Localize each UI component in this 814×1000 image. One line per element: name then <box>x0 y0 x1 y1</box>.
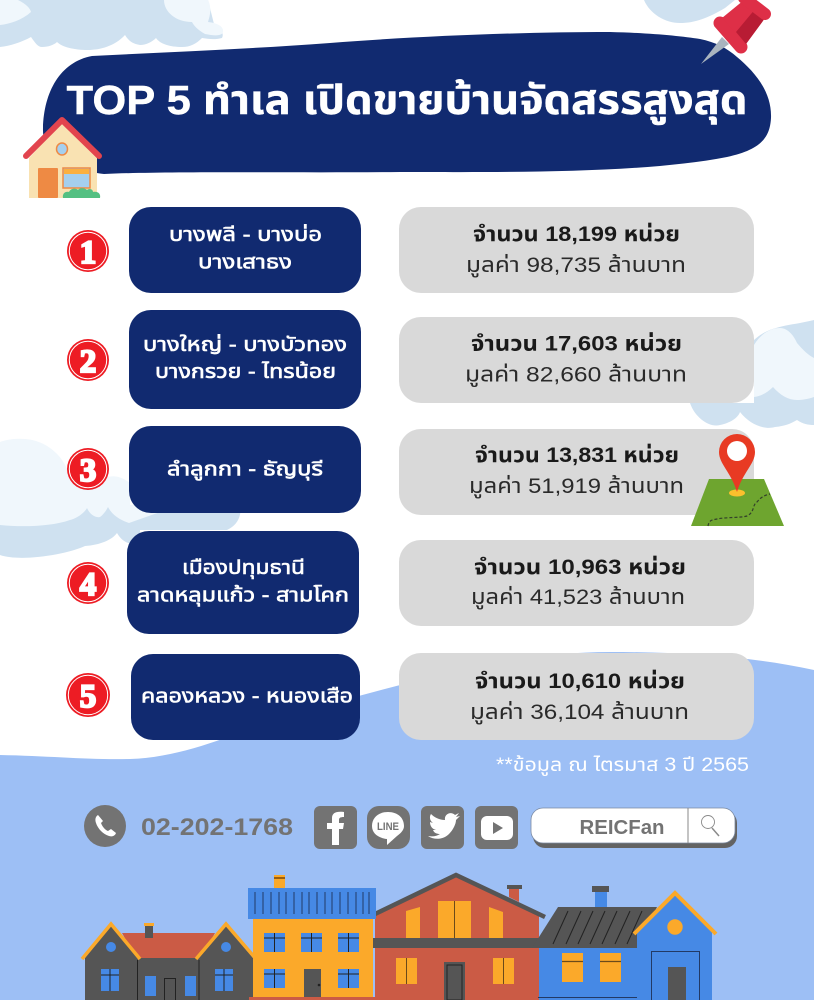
number badge 4 <box>67 562 109 604</box>
stats panel 2: จำนวน 17,603 หน่วย <box>471 332 682 356</box>
area label 3 <box>129 426 361 513</box>
stats panel 2 <box>399 317 754 403</box>
stats panel 5: จำนวน 10,610 หน่วย <box>475 670 685 693</box>
footnote: **ข้อมูล ณ ไตรมาส 3 ปี 2565 <box>496 753 749 777</box>
house: blue <box>532 886 716 1000</box>
phone number: 02-202-1768 <box>141 814 293 841</box>
house: red large <box>373 875 545 1000</box>
number badge 1 <box>67 230 109 272</box>
row 3 <box>67 426 754 515</box>
cloud: top left <box>0 0 223 50</box>
stats panel 1: มูลค่า 98,735 ล้านบาท <box>466 253 686 278</box>
stats panel 5 <box>399 653 754 740</box>
row 1 <box>67 207 754 293</box>
search box: REICFan <box>580 817 664 839</box>
title text: TOP 5 ทำเล เปิดขายบ้านจัดสรรสูงสุด <box>66 77 748 125</box>
illustration: houses <box>82 875 716 1000</box>
icon: line <box>367 806 410 849</box>
icon: facebook <box>314 806 357 849</box>
cloud: top right <box>644 0 735 23</box>
icon: youtube <box>475 806 518 849</box>
area label 2 <box>129 310 361 409</box>
area label 3: ลำลูกกา - ธัญบุรี <box>167 458 323 482</box>
area label 5 <box>131 654 360 740</box>
area label 4: ลาดหลุมแก้ว - สามโคก <box>137 584 349 606</box>
title banner <box>43 32 771 174</box>
area label 4: เมืองปทุมธานี <box>182 557 305 579</box>
search box <box>531 808 737 848</box>
icon: push pin <box>701 0 768 64</box>
stats panel 2: มูลค่า 82,660 ล้านบาท <box>465 362 687 388</box>
stats panel 5: มูลค่า 36,104 ล้านบาท <box>470 700 689 725</box>
cloud: middle right <box>640 320 814 428</box>
area label 5: คลองหลวง - หนองเสือ <box>141 686 353 708</box>
area label 2: บางใหญ่ - บางบัวทอง <box>143 333 347 356</box>
stats panel 3: มูลค่า 51,919 ล้านบาท <box>469 474 684 499</box>
number badge 2: 2 <box>80 344 96 380</box>
area label 1: บางพลี - บางบ่อ <box>169 223 322 246</box>
stats panel 3: จำนวน 13,831 หน่วย <box>475 444 679 467</box>
icon: house <box>26 120 100 198</box>
stats panel 4 <box>399 540 754 626</box>
number badge 3: 3 <box>80 453 96 489</box>
area label 1: บางเสาธง <box>198 252 292 274</box>
contact bar <box>84 805 737 849</box>
stats panel 1 <box>399 207 754 293</box>
number badge 4: 4 <box>80 567 96 603</box>
number badge 3 <box>67 448 109 490</box>
row 5 <box>66 653 754 740</box>
number badge 5: 5 <box>80 679 96 715</box>
stats panel 3 <box>399 429 754 515</box>
stats panel 1: จำนวน 18,199 หน่วย <box>473 223 680 246</box>
icon: phone <box>84 805 126 847</box>
house: grey twin gables <box>82 923 256 1000</box>
row 4 <box>67 531 754 634</box>
stats panel 4: จำนวน 10,963 หน่วย <box>474 556 686 579</box>
background hill <box>0 652 814 1000</box>
icon: twitter <box>421 806 464 849</box>
row 2 <box>67 310 754 409</box>
house: orange <box>248 875 379 1000</box>
area label 2: บางกรวย - ไทรน้อย <box>155 360 336 383</box>
area label 4 <box>127 531 359 634</box>
number badge 2 <box>67 339 109 381</box>
number badge 1: 1 <box>80 235 96 271</box>
stats panel 4: มูลค่า 41,523 ล้านบาท <box>471 585 685 610</box>
area label 1 <box>129 207 361 293</box>
number badge 5 <box>66 673 110 717</box>
cloud: middle left <box>0 439 240 558</box>
icon: map pin on green map <box>691 434 784 526</box>
icon: line: LINE <box>377 821 399 833</box>
